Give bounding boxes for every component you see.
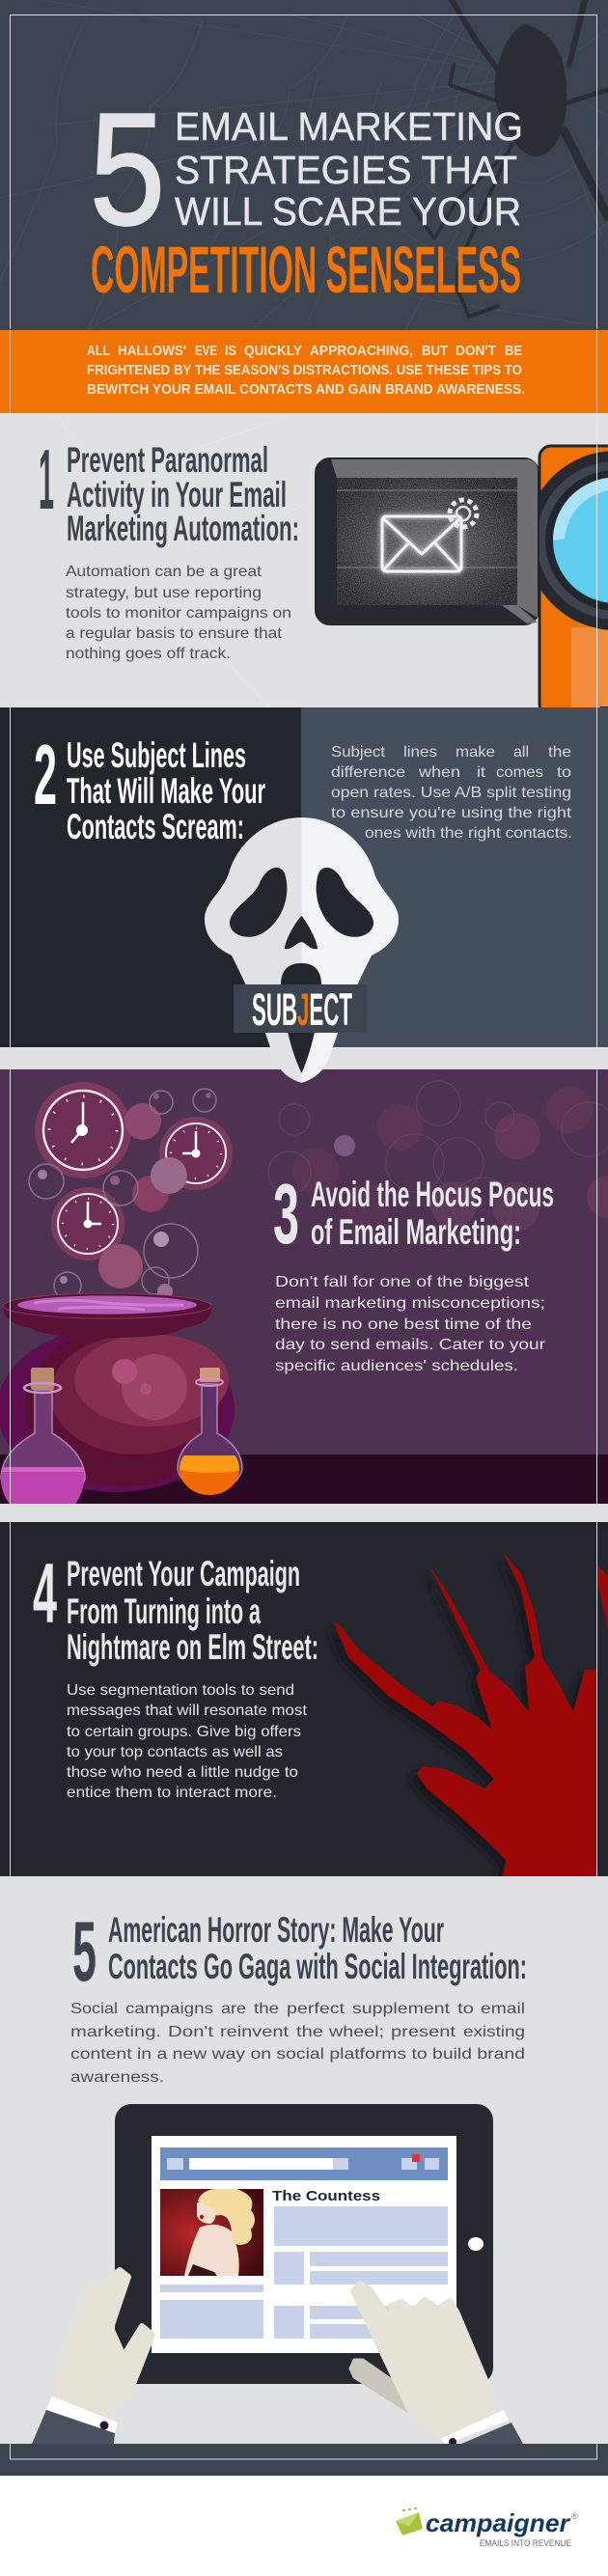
- intro text: BE: [505, 343, 522, 359]
- intro text: DON'T: [456, 343, 496, 359]
- step 2 body text: difference: [331, 764, 405, 781]
- panel: header: [0, 0, 608, 330]
- icon: tablet: [115, 2104, 493, 2384]
- step 5 body text: existing: [463, 2024, 525, 2040]
- intro text: BUT: [422, 343, 448, 359]
- panel: step 3: [0, 1069, 608, 1510]
- step 3 body text: [275, 1274, 546, 1374]
- panel: gap below step 3: [0, 1504, 608, 1522]
- step 1 body text: strategy, but use reporting: [66, 585, 262, 601]
- step 2 body text: comes: [496, 764, 543, 781]
- right potion flask: [177, 1368, 243, 1495]
- panel: gap below step 2: [0, 1047, 608, 1069]
- profile name: The Countess: [272, 2188, 380, 2204]
- profile photo: the countess: [160, 2189, 263, 2276]
- step 1 heading: Marketing Automation:: [67, 509, 299, 548]
- step 3 body text: email marketing misconceptions;: [275, 1295, 545, 1312]
- icon: right hand: [350, 2284, 523, 2446]
- background bubbles: [268, 1081, 608, 1235]
- icon: envelope: [382, 516, 461, 571]
- panel: step 1: [0, 415, 608, 715]
- step 4 heading: Prevent Your Campaign: [67, 1554, 300, 1593]
- step 2 heading: Use Subject Lines: [67, 735, 246, 775]
- step 4 heading: From Turning into a: [67, 1592, 261, 1631]
- step 4 body text: those who need a little nudge to: [67, 1764, 298, 1781]
- clock 1: [35, 1082, 131, 1178]
- step 5 body text: awareness.: [70, 2069, 164, 2086]
- panel: step 5: [0, 1876, 608, 2446]
- social page top bar: [160, 2147, 448, 2180]
- panel: footer bar: [0, 2444, 608, 2476]
- step 2 body text: ones with the right contacts.: [365, 825, 572, 842]
- intro text: EVE: [195, 343, 217, 359]
- step 5 body text: supplement: [352, 2001, 451, 2017]
- step 1 body text: nothing goes off track.: [66, 646, 231, 662]
- step 4 heading: 4: [33, 1545, 57, 1641]
- step 5 body text: reinvent: [220, 2024, 290, 2040]
- icon: blood-red claw hand: [328, 1552, 608, 1888]
- step 2 body text: lines: [403, 744, 437, 761]
- step 1 body text: Automation can be a great: [66, 564, 263, 580]
- step 5 heading: [72, 1903, 527, 1999]
- step 5 body text: the: [296, 2024, 323, 2040]
- bubbles rising from cauldron: [29, 1089, 216, 1299]
- step 5 body text: [70, 2001, 525, 2086]
- step 5 body text: the: [254, 2001, 279, 2017]
- intro text: IS: [225, 343, 236, 359]
- step 5 body text: marketing.: [70, 2024, 161, 2040]
- intro text: BEWITCH YOUR EMAIL CONTACTS AND GAIN BRAND AWARENESS.: [87, 381, 525, 398]
- logo: campaigner: [396, 2507, 578, 2549]
- step 2 body text: Subject: [331, 744, 386, 761]
- icon: video camera: [316, 446, 608, 715]
- title: large numeral 5: 5: [90, 80, 165, 258]
- step 2 body text: the: [548, 744, 571, 761]
- intro text: APPROACHING,: [310, 343, 413, 359]
- step 1 heading: [39, 431, 299, 548]
- step 2 body text: to: [557, 764, 571, 781]
- step 4 body text: messages that will resonate most: [67, 1703, 308, 1719]
- step 2 body text: open rates. Use A/B split testing: [331, 785, 571, 801]
- step 5 body text: are: [221, 2001, 246, 2017]
- left potion flask: [0, 1368, 87, 1510]
- step 2 body text: make: [456, 744, 495, 761]
- spider web: [0, 0, 608, 330]
- subject banner: SUBJECT: [252, 983, 352, 1035]
- step 2 heading: That Will Make Your: [67, 771, 265, 811]
- step 1 body text: a regular basis to ensure that: [66, 625, 283, 642]
- step 4 body text: entice them to interact more.: [67, 1785, 277, 1801]
- step 3 body text: specific audiences' schedules.: [275, 1358, 518, 1374]
- panel: step 4: [0, 1522, 608, 1888]
- step 1 body text: tools to monitor campaigns on: [66, 605, 291, 622]
- step 5 body text: Social: [70, 2001, 118, 2017]
- intro text: [87, 343, 525, 398]
- step 1 heading: Activity in Your Email: [67, 475, 287, 514]
- step 3 heading: [273, 1166, 554, 1261]
- logo: campaigner: EMAILS INTO REVENUE: [480, 2538, 571, 2549]
- step 4 heading: [33, 1545, 318, 1667]
- step 4 body text: to certain groups. Give big offers: [67, 1724, 301, 1740]
- intro text: QUICKLY: [244, 343, 302, 359]
- step 5 body text: Don't: [168, 2024, 214, 2040]
- icon: spider: [411, 0, 608, 317]
- subject banner: [234, 983, 367, 1035]
- cauldron: [0, 1293, 235, 1492]
- intro text: HALLOWS': [118, 343, 186, 359]
- step 5 body text: to: [457, 2001, 474, 2017]
- logo envelope: [396, 2507, 423, 2535]
- step 2 heading: Contacts Scream:: [67, 807, 244, 846]
- step 3 body text: day to send emails. Cater to your: [275, 1337, 546, 1353]
- flip-out screen: [316, 458, 539, 624]
- content placeholder blocks: [160, 2206, 448, 2339]
- step 5 body text: campaigns: [125, 2001, 213, 2017]
- step 5 body text: perfect: [287, 2001, 345, 2017]
- step 2 body text: it: [477, 764, 486, 781]
- icon: scream mask: [205, 817, 399, 1083]
- step 4 heading: Nightmare on Elm Street:: [67, 1627, 318, 1667]
- clock 3: [51, 1187, 124, 1260]
- panel: intro band: [0, 330, 608, 415]
- intro text: ALL: [87, 343, 110, 359]
- step 5 heading: 5: [72, 1903, 97, 1999]
- step 4 body text: to your top contacts as well as: [67, 1744, 283, 1760]
- title: white lines: STRATEGIES THAT: [175, 148, 517, 192]
- step 5 body text: content in a new way on social platforms to build brand: [70, 2046, 525, 2063]
- step 5 body text: present: [391, 2024, 456, 2040]
- clock 2: [159, 1117, 233, 1190]
- step 2 heading: 2: [34, 727, 57, 822]
- icon: gear: [450, 500, 477, 527]
- step 3 heading: 3: [273, 1166, 299, 1261]
- step 2 body text: when: [418, 764, 460, 781]
- step 4 body text: [67, 1682, 308, 1801]
- step 1 heading: 1: [39, 431, 54, 527]
- step 3 body text: Don't fall for one of the biggest: [275, 1274, 530, 1290]
- camera body: [539, 444, 608, 707]
- step 2 body text: [331, 744, 572, 842]
- step 2 body text: all: [513, 744, 529, 761]
- step 4 body text: Use segmentation tools to send: [67, 1682, 294, 1699]
- logo: campaigner: campaigner: [426, 2508, 571, 2537]
- logo: campaigner: ®: [571, 2511, 578, 2521]
- step 1 heading: Prevent Paranormal: [67, 440, 268, 480]
- intro text: FRIGHTENED BY THE SEASON'S DISTRACTIONS. USE THESE TIPS TO: [87, 362, 522, 378]
- step 2 body text: to ensure you're using the right: [331, 805, 572, 821]
- title: white lines: EMAIL MARKETING: [175, 104, 523, 149]
- step 5 body text: email: [481, 2001, 525, 2017]
- step 5 body text: wheel;: [328, 2024, 384, 2040]
- panel: step 2: [0, 707, 608, 1047]
- step 2 heading: [34, 727, 265, 846]
- title: white lines: [175, 104, 523, 234]
- icon: left hand: [32, 2270, 152, 2444]
- title: white lines: WILL SCARE YOUR: [175, 189, 521, 234]
- step 1 body text: [66, 564, 291, 662]
- step 3 body text: there is no one best time of the: [275, 1316, 532, 1333]
